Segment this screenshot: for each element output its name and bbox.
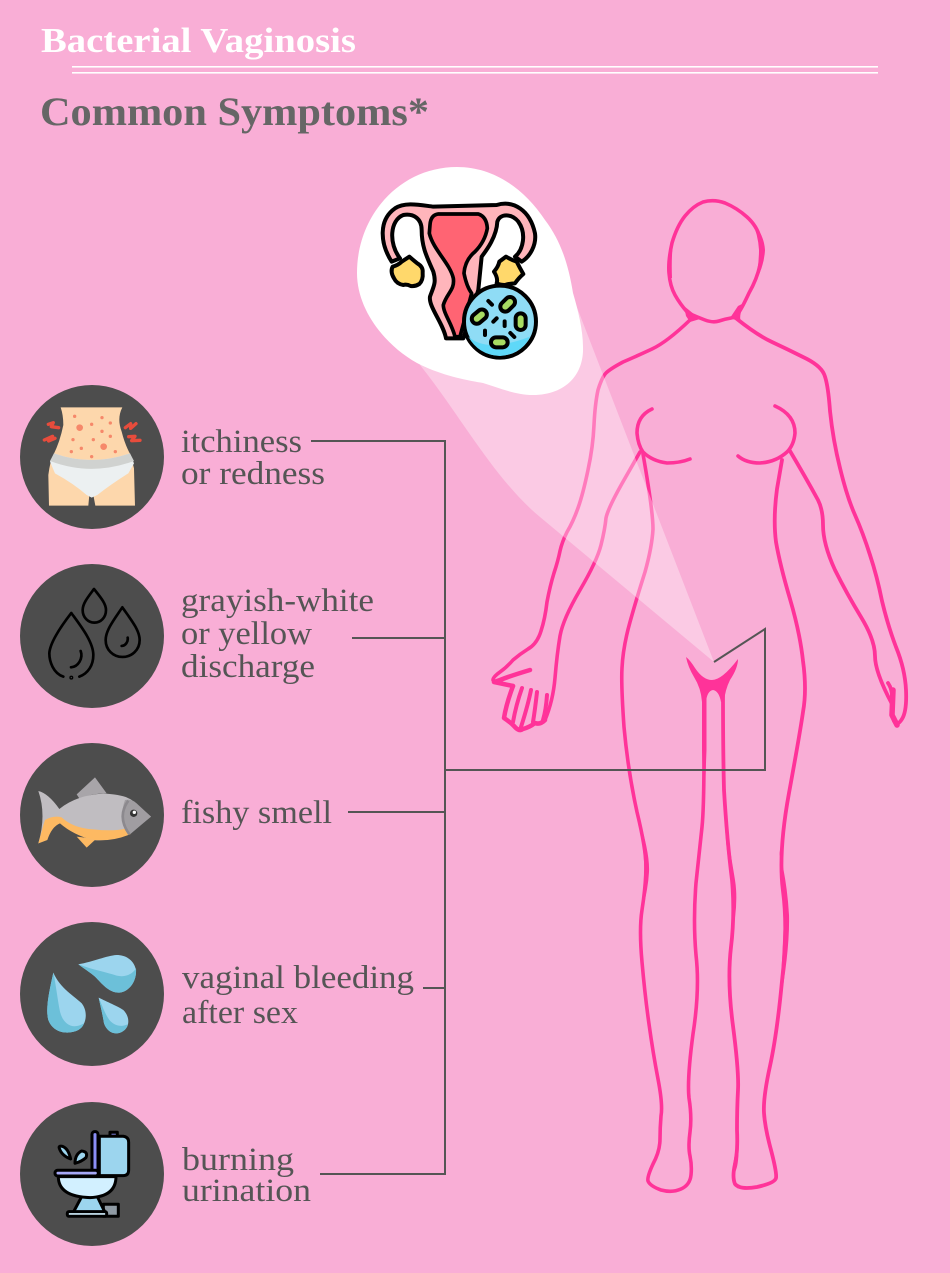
symptom 2: discharge	[20, 564, 374, 708]
left torso and outer left leg	[622, 454, 706, 1191]
label: burning urination	[182, 1142, 311, 1209]
icon: blue droplets	[20, 922, 164, 1066]
body outline figure	[493, 201, 906, 1191]
label: itchiness or redness	[181, 424, 325, 492]
label: discharge: or yellow	[181, 616, 312, 652]
reproductive organ	[383, 204, 535, 338]
right ovary	[494, 257, 523, 285]
label: burning urination: urination	[182, 1173, 311, 1209]
icon: fish	[20, 743, 164, 887]
callout bubble	[357, 167, 583, 395]
label: vaginal bleeding after sex: vaginal bleeding	[182, 960, 414, 996]
label: vaginal bleeding after sex	[182, 960, 414, 1031]
connector lines	[311, 441, 765, 1174]
chest lines	[637, 406, 795, 463]
spotlight beam	[420, 297, 714, 662]
label: discharge: grayish-white	[181, 583, 374, 619]
label: itchiness or redness: or redness	[181, 456, 325, 492]
label: burning urination: burning	[182, 1142, 294, 1178]
label: itchiness or redness: itchiness	[181, 424, 302, 460]
icon: itchy abdomen	[20, 385, 164, 529]
label: vaginal bleeding after sex: after sex	[182, 995, 299, 1031]
label: discharge	[181, 583, 374, 685]
uterine cavity	[429, 214, 487, 337]
pelvis	[686, 657, 738, 702]
symptom 3: fishy smell	[20, 743, 332, 887]
title: Bacterial Vaginosis	[41, 21, 356, 60]
left ovary	[392, 257, 423, 286]
symptom 4: bleeding	[20, 922, 414, 1066]
label: fishy smell: fishy smell	[181, 795, 332, 831]
right leg	[723, 460, 805, 1189]
label: discharge: discharge	[181, 649, 315, 685]
symptom 5: burning urination	[20, 1102, 311, 1246]
left arm	[493, 320, 690, 730]
heading: common symptoms: Common Symptoms*	[40, 89, 429, 134]
icon: three drops	[20, 564, 164, 708]
icon: toilet	[20, 1102, 164, 1246]
symptom 1: itchiness or redness	[20, 385, 325, 529]
head outline	[668, 201, 765, 322]
right arm	[737, 319, 906, 725]
icon: uterus with bacteria	[383, 204, 536, 358]
bacteria circle	[464, 286, 536, 358]
